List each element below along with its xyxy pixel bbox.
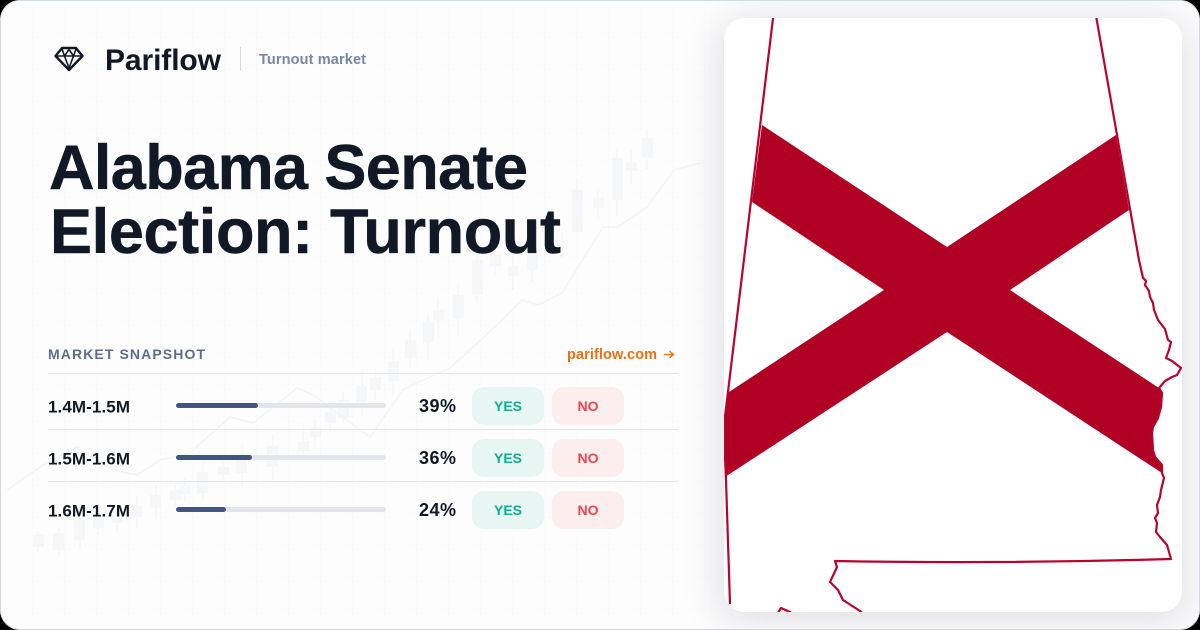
row: 1.4M-1.5M bbox=[48, 387, 624, 425]
yes button: YES bbox=[494, 398, 522, 414]
red saltire bbox=[722, 125, 1162, 477]
title bbox=[49, 133, 561, 267]
no button bbox=[552, 491, 624, 529]
snapshot heading: MARKET SNAPSHOT bbox=[48, 346, 205, 362]
row: 1.4M-1.5M: 1.4M-1.5M bbox=[48, 398, 130, 416]
progress bar 39% bbox=[176, 403, 386, 408]
tagline: Turnout market bbox=[259, 52, 366, 68]
no button: NO bbox=[578, 502, 599, 518]
panel: Alabama flag map bbox=[724, 18, 1182, 612]
percent: 36% bbox=[419, 448, 456, 468]
state outline bbox=[724, 10, 1181, 616]
no button: NO bbox=[578, 398, 599, 414]
percent: 39% bbox=[419, 396, 456, 416]
yes button: YES bbox=[494, 502, 522, 518]
row: 1.6M-1.7M bbox=[48, 491, 624, 529]
site link: pariflow.com bbox=[567, 347, 657, 363]
yes button bbox=[472, 439, 544, 477]
logo wordmark: Pariflow bbox=[105, 44, 222, 77]
progress bar 36% bbox=[176, 455, 386, 460]
no button bbox=[552, 439, 624, 477]
title: Election: Turnout bbox=[50, 197, 561, 267]
row: 1.5M-1.6M: 1.5M-1.6M bbox=[48, 450, 130, 468]
yes button bbox=[472, 387, 544, 425]
tagline bbox=[240, 47, 366, 71]
title: Alabama Senate bbox=[49, 133, 528, 203]
percent: 24% bbox=[419, 500, 456, 520]
logo: diamond icon bbox=[56, 48, 82, 70]
no button: NO bbox=[578, 450, 599, 466]
row: 1.5M-1.6M bbox=[48, 439, 624, 477]
yes button bbox=[472, 491, 544, 529]
row: 1.6M-1.7M: 1.6M-1.7M bbox=[48, 502, 130, 520]
background candlestick chart bbox=[7, 130, 700, 556]
no button bbox=[552, 387, 624, 425]
yes button: YES bbox=[494, 450, 522, 466]
progress bar 24% bbox=[176, 507, 386, 512]
